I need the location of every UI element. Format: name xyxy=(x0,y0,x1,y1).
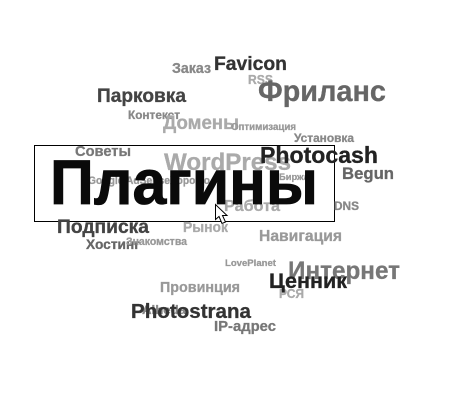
tag: Begun: Begun xyxy=(342,164,394,183)
tag: Парковка: Парковка xyxy=(97,86,186,107)
tag: Photostrana: Photostrana xyxy=(131,300,252,323)
tag: WordPress: WordPress xyxy=(164,149,291,176)
tag: РСЯ: РСЯ xyxy=(279,287,304,301)
tag: Биржа: Биржа xyxy=(279,172,310,183)
tag: Подписка: Подписка xyxy=(57,217,149,238)
tag: RSS: RSS xyxy=(248,73,273,87)
tag: Контекст: Контекст xyxy=(128,108,180,122)
tag: Домены: Домены xyxy=(163,112,239,134)
tag: Хорошо: Хорошо xyxy=(170,175,210,187)
tag: Favicon: Favicon xyxy=(214,54,287,75)
tag: Установка: Установка xyxy=(294,131,354,145)
heading: Плагины: Плагины xyxy=(50,148,318,218)
icon: mouse cursor xyxy=(216,204,227,224)
tag: Photocash: Photocash xyxy=(260,142,378,168)
tag: Google AdSense: Google AdSense xyxy=(88,175,170,187)
highlighted box xyxy=(34,146,334,222)
tag: LovePlanet: LovePlanet xyxy=(225,258,277,269)
tag: Интернет: Интернет xyxy=(288,258,400,285)
tag: DNS: DNS xyxy=(334,199,359,213)
tag: Навигация: Навигация xyxy=(259,228,342,245)
tag: Работа: Работа xyxy=(224,198,280,215)
tag: Фриланс: Фриланс xyxy=(258,75,386,108)
tag: IP-адрес: IP-адрес xyxy=(214,319,276,335)
tag: Знакомства: Знакомства xyxy=(126,236,188,248)
tag: Рынок: Рынок xyxy=(183,220,229,236)
tag: Советы: Советы xyxy=(75,143,131,160)
tag: Заказ: Заказ xyxy=(172,61,211,77)
tag: Провинция: Провинция xyxy=(160,280,240,296)
tag: Alheda: Alheda xyxy=(142,303,186,317)
tag: Оптимизация: Оптимизация xyxy=(231,122,296,133)
tag: Ценник: Ценник xyxy=(269,268,347,293)
tag: Хостинг: Хостинг xyxy=(86,236,140,252)
